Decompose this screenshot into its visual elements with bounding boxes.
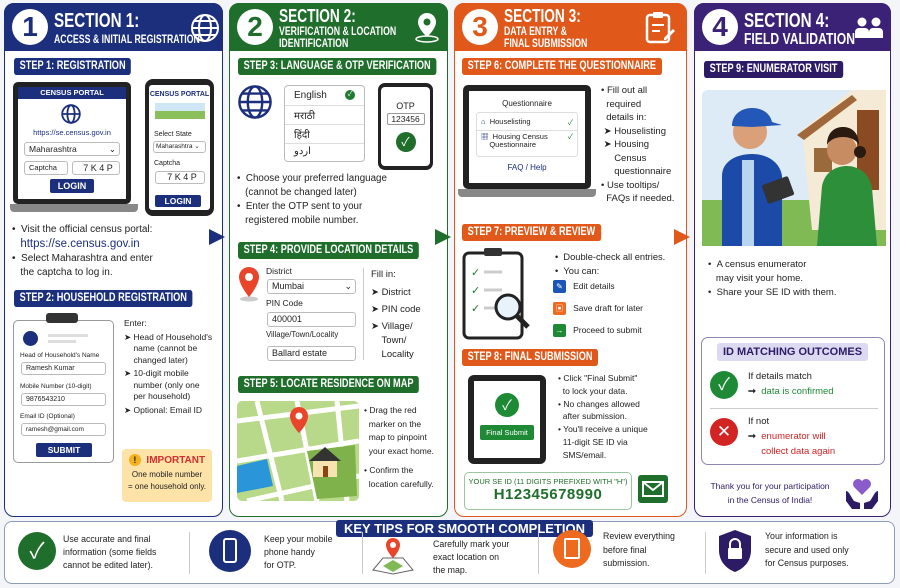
- review options: ▣: [556, 304, 564, 313]
- step 6 bullets: • Use tooltips/: [601, 180, 659, 190]
- step 5 bullets: map to pinpoint: [369, 432, 427, 442]
- tip 1: information (some fields: [63, 547, 156, 557]
- household form card: Ramesh Kumar: [26, 365, 75, 372]
- step 8 bullets: to lock your data.: [563, 386, 627, 396]
- step 6 bullets: required: [606, 98, 641, 110]
- language selector: [284, 85, 365, 162]
- tip 1: [18, 532, 156, 570]
- header: section 1: ACCESS & INITIAL REGISTRATION: [54, 34, 200, 46]
- step 3 bullets: • Enter the OTP sent to your: [237, 201, 362, 212]
- tip 3: Carefully mark your: [433, 539, 509, 549]
- icon: heart in hands: [846, 479, 878, 509]
- header: section 4: FIELD VALIDATION: [744, 31, 855, 48]
- icon: language globe: [238, 85, 272, 119]
- laptop questionnaire: ▦ Housing Census: [481, 132, 548, 141]
- step 9 bullets: • A census enumerator: [708, 259, 806, 270]
- step 4 label: [238, 242, 419, 259]
- icon: review clipboard: ✓: [471, 303, 480, 315]
- laptop mockup: ⌄: [109, 144, 116, 154]
- step 3 bullets: • Choose your preferred language: [237, 173, 387, 184]
- household form card: Head of Household's Name: [20, 352, 99, 359]
- laptop mockup: Maharashtra: [29, 144, 77, 154]
- step 1 bullets: https://se.census.gov.in: [20, 238, 140, 250]
- language selector: ✓: [348, 91, 352, 98]
- step 4 fill-in list: ➤ PIN code: [371, 304, 421, 315]
- header: section 3: DATA ENTRY &: [504, 26, 567, 38]
- review options: ✎: [556, 282, 563, 291]
- important callout: [122, 449, 212, 502]
- step 5 bullets: • Drag the red: [364, 405, 417, 415]
- step 2 label: [14, 290, 193, 307]
- step 2 bullets: number (only one: [133, 380, 200, 390]
- outcome: match: If details match: [748, 371, 812, 382]
- language selector: हिंदी: [294, 130, 310, 141]
- language selector: اردو: [294, 146, 311, 157]
- step 4 fill-in list: Locality: [382, 349, 414, 360]
- step 2 bullets: [124, 318, 212, 414]
- OTP phone: 123456: [391, 114, 420, 124]
- step 6 label: [462, 58, 662, 75]
- step 4 fill-in list: [371, 269, 421, 360]
- important callout: = one household only.: [128, 482, 206, 491]
- header: section 4: SECTION 4:: [744, 10, 829, 32]
- step 9 bullets: may visit your home.: [716, 273, 803, 284]
- outcome: mismatch: [710, 416, 835, 457]
- step 1 bullets: • Visit the official census portal:: [12, 224, 152, 235]
- location form: 400001: [272, 314, 302, 324]
- step 5 bullets: marker on the: [369, 418, 421, 428]
- tablet final submit: Final Submit: [486, 428, 528, 437]
- household form card: ramesh@gmail.com: [26, 426, 84, 433]
- step 7 bullets: • You can:: [555, 266, 599, 276]
- step 1 bullets: the captcha to log in.: [20, 267, 113, 278]
- step 5 bullets: [364, 405, 434, 488]
- tip 5: Your information is: [765, 531, 838, 541]
- location form: ⌄: [344, 281, 352, 291]
- step 2 bullets: Enter:: [124, 318, 147, 328]
- step 5 bullets: your exact home.: [369, 446, 434, 456]
- step 5 bullets: • Confirm the: [364, 465, 413, 475]
- icon: email: [638, 475, 668, 503]
- OTP phone: OTP: [396, 101, 415, 111]
- header: section 3: 3: [472, 11, 488, 42]
- phone mockup: Maharashtra ⌄: [156, 143, 200, 150]
- SE ID box: H12345678990: [494, 486, 602, 503]
- header: section 4: [694, 3, 891, 51]
- location form: Ballard estate: [272, 348, 327, 358]
- location form: Mumbai: [272, 281, 304, 291]
- tip 2: Keep your mobile: [264, 534, 332, 544]
- phone mockup: 7 K 4 P: [167, 172, 197, 182]
- step 1 label: [14, 58, 131, 75]
- ID matching outcomes box: [701, 337, 885, 465]
- step 1 label: STEP 1: REGISTRATION: [20, 60, 126, 72]
- step 2 bullets: per household): [133, 391, 190, 401]
- step 8 bullets: after submission.: [563, 411, 627, 421]
- step 6 bullets: ➤ Housing: [604, 139, 649, 150]
- header: section 2: [229, 3, 448, 51]
- tablet final submit: [468, 375, 546, 464]
- review options: Proceed to submit: [573, 325, 642, 335]
- household form card: 9876543210: [26, 396, 65, 403]
- tip 5: for Census purposes.: [765, 558, 849, 568]
- OTP phone: ✓: [401, 135, 410, 149]
- step 8 bullets: • You'll receive a unique: [558, 424, 648, 434]
- step 2 bullets: changed later): [133, 354, 188, 364]
- SE ID box: [464, 472, 632, 510]
- language selector: English: [294, 90, 327, 101]
- step 4 label: STEP 4: PROVIDE LOCATION DETAILS: [244, 244, 413, 256]
- outcome: mismatch: If not: [748, 416, 769, 427]
- laptop questionnaire: [458, 85, 596, 197]
- step 4 fill-in list: ➤ District: [371, 287, 411, 298]
- laptop mockup: [10, 82, 138, 212]
- laptop questionnaire: FAQ / Help: [507, 163, 547, 172]
- step 8 bullets: 11-digit SE ID via: [563, 437, 628, 447]
- location form: [266, 266, 356, 361]
- map illustration: [237, 401, 359, 501]
- household form card: SUBMIT: [48, 445, 80, 455]
- step 8 bullets: • No changes allowed: [558, 399, 640, 409]
- outcome: match: ➞ data is confirmed: [748, 386, 834, 397]
- header: section 2: IDENTIFICATION: [279, 38, 348, 50]
- thank you note: [710, 481, 830, 505]
- outcome: mismatch: ✕: [717, 422, 731, 441]
- step 3 bullets: (cannot be changed later): [245, 187, 357, 198]
- phone mockup: [145, 79, 214, 216]
- step 8 bullets: SMS/email.: [563, 450, 606, 460]
- header: section 3: SECTION 3:: [504, 6, 581, 26]
- household form card: Email ID (Optional): [20, 413, 75, 420]
- header: section 2: 2: [247, 11, 263, 42]
- location form: PIN Code: [266, 298, 303, 308]
- step 2 label: STEP 2: HOUSEHOLD REGISTRATION: [20, 292, 187, 304]
- step 2 bullets: name (cannot be: [133, 343, 197, 353]
- step 1 bullets: [12, 224, 153, 278]
- panel: section 4: [694, 3, 891, 517]
- panel: key tips: [4, 521, 895, 584]
- header: section 2: VERIFICATION & LOCATION: [279, 26, 396, 38]
- step 5 bullets: location carefully.: [369, 478, 434, 488]
- thank you note: Thank you for your participation: [710, 481, 830, 491]
- tip 4: [553, 530, 675, 568]
- tip 1: Use accurate and final: [63, 534, 151, 544]
- tip 1: ✓: [29, 538, 45, 563]
- arrow: section 1 to 2: [209, 229, 225, 245]
- step 6 bullets: details in:: [606, 112, 646, 123]
- step 7 bullets: • Double-check all entries.: [555, 252, 665, 262]
- step 2 bullets: ➤ Optional: Email ID: [124, 404, 202, 414]
- panel: section 3: [454, 3, 687, 517]
- tip 2: for OTP.: [264, 560, 296, 570]
- step 8 bullets: • Click "Final Submit": [558, 373, 637, 383]
- step 3 label: STEP 3: LANGUAGE & OTP VERIFICATION: [244, 60, 431, 72]
- arrow: section 2 to 3: [435, 229, 451, 245]
- step 8 bullets: [558, 373, 648, 460]
- laptop mockup: 7 K 4 P: [83, 163, 113, 173]
- step 9 label: STEP 9: ENUMERATOR VISIT: [710, 63, 837, 75]
- laptop mockup: CENSUS PORTAL: [40, 88, 104, 97]
- enumerator illustration: [702, 90, 886, 246]
- tip 4: Review everything: [603, 531, 675, 541]
- review options: →: [556, 326, 564, 335]
- step 5 label: STEP 5: LOCATE RESIDENCE ON MAP: [244, 378, 413, 390]
- outcome: match: [710, 371, 834, 399]
- header: section 3: [454, 3, 687, 51]
- language selector: मराठी: [294, 111, 315, 122]
- icon: review clipboard: [462, 248, 530, 340]
- laptop mockup: https://se.census.gov.in: [33, 128, 111, 137]
- step 8 label: STEP 8: FINAL SUBMISSION: [468, 351, 593, 363]
- step 6 bullets: ➤ Houselisting: [604, 126, 666, 136]
- SE ID box: YOUR SE ID (11 DIGITS PREFIXED WITH "H"): [469, 477, 627, 486]
- laptop questionnaire: ✓: [568, 132, 573, 141]
- location form: Village/Town/Locality: [266, 330, 338, 339]
- important callout: !: [133, 455, 136, 465]
- tip 3: the map.: [433, 565, 467, 575]
- important callout: One mobile number: [132, 470, 202, 479]
- review options: Save draft for later: [573, 303, 643, 313]
- tip 3: [372, 538, 510, 575]
- location form: District: [266, 266, 292, 276]
- step 6 bullets: Census: [614, 152, 646, 164]
- icon: location pin: [415, 13, 439, 43]
- header: section 3: FINAL SUBMISSION: [504, 38, 587, 50]
- outcome: match: ✓: [718, 375, 730, 394]
- arrow: section 3 to 4: [674, 229, 690, 245]
- header: section 4: 4: [712, 11, 728, 42]
- tip 5: secure and used only: [765, 544, 849, 554]
- icon: people: [855, 18, 883, 38]
- phone mockup: CENSUS PORTAL: [150, 91, 209, 98]
- step 9 bullets: • Share your SE ID with them.: [708, 287, 836, 298]
- laptop questionnaire: Questionnaire: [489, 140, 536, 149]
- icon: clipboard: [646, 12, 675, 44]
- step 3 bullets: registered mobile number.: [245, 215, 358, 226]
- phone mockup: Select State: [154, 131, 192, 138]
- outcome: mismatch: ➞ enumerator will: [748, 431, 826, 442]
- header: section 1: SECTION 1:: [54, 10, 139, 32]
- phone mockup: Captcha: [154, 160, 180, 167]
- step 3 label: [238, 58, 436, 75]
- step 4 fill-in list: Fill in:: [371, 269, 396, 280]
- step 4 fill-in list: Town/: [382, 335, 406, 346]
- outcome: mismatch: collect data again: [761, 446, 835, 457]
- panel: section 2: [229, 3, 448, 517]
- step 6 bullets: [601, 85, 674, 204]
- tip 5: [719, 530, 849, 572]
- step 6 bullets: FAQs if needed.: [606, 193, 674, 204]
- header: section 1: 1: [22, 11, 38, 42]
- icon: globe: [191, 14, 219, 42]
- tips title: KEY TIPS FOR SMOOTH COMPLETION: [344, 521, 585, 536]
- icon: red pin: [239, 267, 259, 302]
- step 4 fill-in list: ➤ Village/: [371, 321, 413, 332]
- review options: [553, 280, 643, 337]
- step 8 label: [462, 349, 598, 366]
- step 6 label: STEP 6: COMPLETE THE QUESTIONNAIRE: [468, 60, 656, 72]
- laptop mockup: LOGIN: [58, 181, 86, 191]
- tip 1: cannot be edited later).: [63, 560, 153, 570]
- step 9 bullets: [708, 259, 836, 298]
- laptop mockup: Captcha: [29, 163, 57, 172]
- panel: section 1: [4, 3, 223, 517]
- tip 4: before final: [603, 544, 647, 554]
- step 1 bullets: • Select Maharashtra and enter: [12, 253, 153, 264]
- step 9 label: [704, 61, 843, 78]
- header: section 1: [4, 3, 223, 51]
- step 7 label: [462, 224, 601, 241]
- step 2 bullets: ➤ 10-digit mobile: [124, 368, 189, 378]
- phone mockup: LOGIN: [165, 196, 191, 206]
- tip 2: [209, 530, 332, 572]
- household form card: [13, 320, 114, 463]
- tip 3: exact location on: [433, 552, 499, 562]
- thank you note: in the Census of India!: [728, 495, 812, 505]
- important callout: IMPORTANT: [146, 455, 205, 466]
- household form card: Mobile Number (10-digit): [20, 383, 92, 390]
- step 6 bullets: questionnaire: [614, 166, 671, 177]
- ID matching outcomes box: ID MATCHING OUTCOMES: [723, 346, 862, 358]
- tip 2: phone handy: [264, 547, 315, 557]
- review options: Edit details: [573, 281, 615, 291]
- icon: review clipboard: ✓: [471, 285, 480, 297]
- step 3 bullets: [237, 173, 387, 226]
- step 5 label: [238, 376, 419, 393]
- laptop questionnaire: ⌂ Houselisting: [481, 117, 531, 126]
- tablet final submit: ✓: [502, 397, 512, 413]
- step 6 bullets: • Fill out all: [601, 85, 647, 96]
- laptop questionnaire: Questionnaire: [502, 99, 552, 108]
- tip 4: submission.: [603, 558, 649, 568]
- step 7 label: STEP 7: PREVIEW & REVIEW: [468, 226, 595, 238]
- OTP phone: [378, 83, 433, 170]
- header: section 2: SECTION 2:: [279, 6, 356, 26]
- icon: review clipboard: ✓: [471, 267, 480, 279]
- step 7 bullets: [555, 252, 665, 276]
- laptop questionnaire: ✓: [568, 118, 573, 127]
- step 2 bullets: ➤ Head of Household's: [124, 332, 212, 342]
